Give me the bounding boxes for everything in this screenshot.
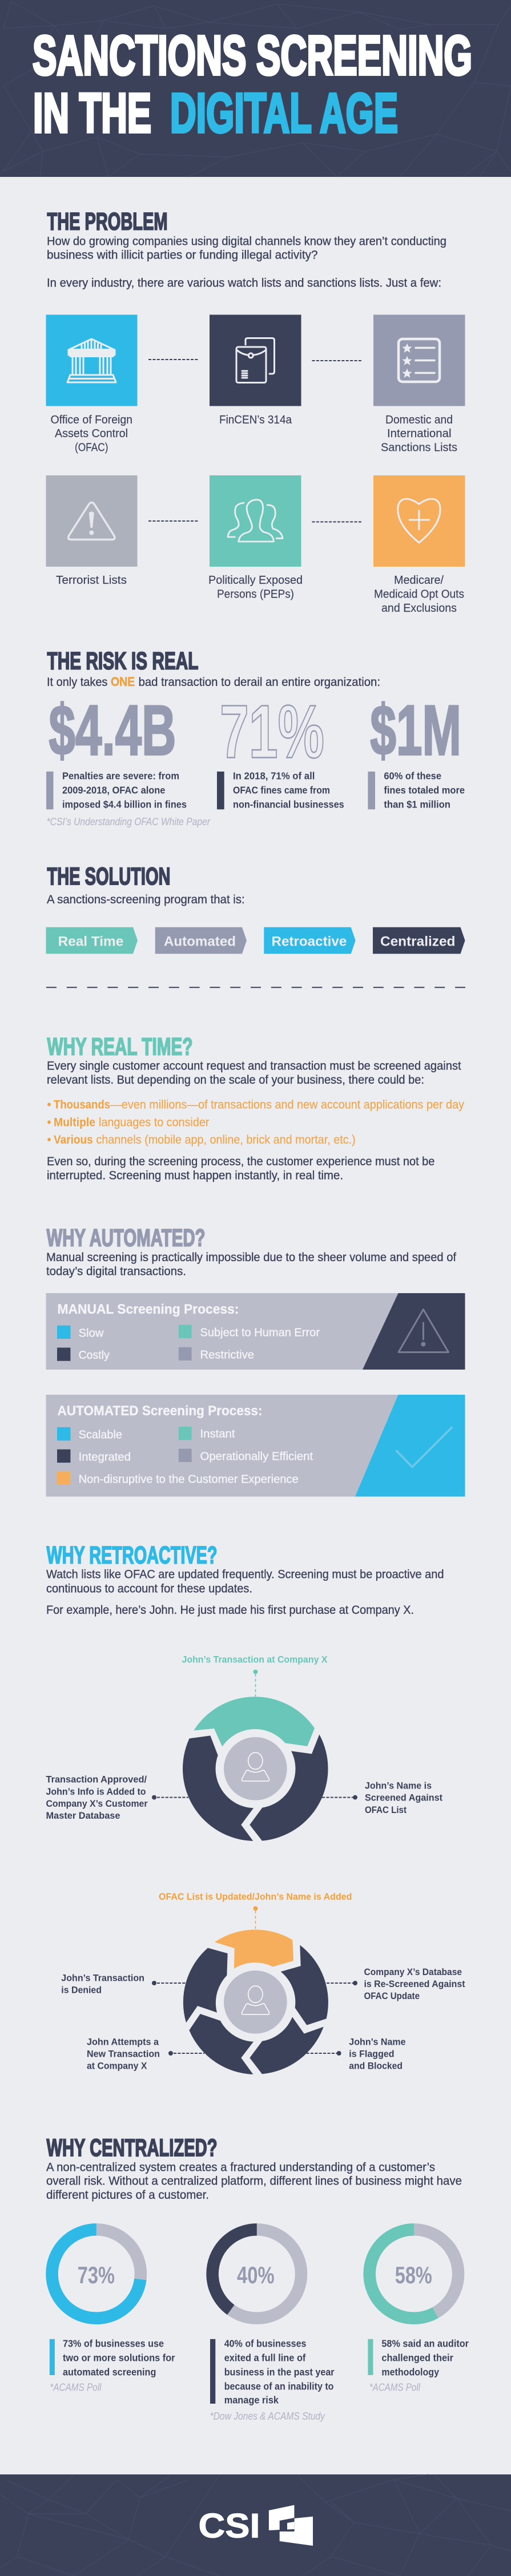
- bullet list: Multiple: [54, 1116, 95, 1129]
- icon: envelopes: [236, 338, 274, 382]
- label: Politically Exposed: [208, 574, 303, 587]
- icon: government building: [67, 339, 116, 382]
- intro text: Every single customer account request and transaction must be screened against: [47, 1059, 461, 1072]
- cycle chart: [183, 1929, 328, 2074]
- intro text: How do growing companies using digital channels know they aren’t conducting: [47, 235, 446, 248]
- panel: manual process: Subject to Human Error: [200, 1326, 320, 1339]
- subheading: bad transaction to derail an entire organization:: [139, 676, 380, 689]
- donut: 58%: [369, 2230, 458, 2318]
- intro text: different pictures of a customer.: [46, 2189, 209, 2202]
- label: [50, 414, 132, 454]
- panel: manual process: MANUAL Screening Process:: [57, 1302, 239, 1317]
- panel: manual process: Costly: [79, 1349, 110, 1362]
- intro text: today’s digital transactions.: [46, 1265, 186, 1278]
- fact: 73%: 73% of businesses use: [63, 2337, 164, 2349]
- connector: upper right: [327, 1981, 357, 1985]
- fact: 73%: *ACAMS Poll: [50, 2382, 102, 2393]
- section: why automated: [46, 1225, 465, 1496]
- logo: CSI: [199, 2506, 260, 2545]
- label: [381, 414, 457, 454]
- diagram: first cycle: [46, 1655, 442, 1841]
- closing text: interrupted. Screening must happen instantly, in real time.: [47, 1169, 343, 1182]
- bullet list: channels (mobile app, online, brick and mortar, etc.): [96, 1133, 356, 1146]
- heading: why automated: WHY AUTOMATED?: [47, 1225, 206, 1252]
- bullet list: Various: [54, 1133, 93, 1146]
- panel: manual process: [46, 1293, 465, 1370]
- connector dashes: [148, 360, 363, 522]
- panel: automated process: Operationally Efficient: [200, 1450, 313, 1463]
- connector: upper left: [152, 1981, 186, 1985]
- fact: 40%: because of an inability to: [224, 2380, 333, 2392]
- fact: 58%: challenged their: [381, 2352, 453, 2364]
- stat: $1M: $1M: [370, 692, 461, 770]
- icon: person: [242, 1753, 269, 1781]
- label: [208, 574, 303, 600]
- tile: PEPs: [208, 475, 303, 600]
- fact: 40%: exited a full line of: [224, 2352, 306, 2364]
- icon: star list: [399, 339, 440, 382]
- cycle label left: Company X’s Customer: [46, 1799, 148, 1809]
- stat: $1M: [368, 692, 465, 810]
- closing text: [47, 1155, 434, 1182]
- stat: $1M: 60% of these: [384, 770, 441, 782]
- title: IN THE: [33, 82, 151, 144]
- arrow: centralized: [373, 927, 465, 954]
- stat: $4.4B: 2009-2018, OFAC alone: [62, 785, 166, 796]
- label: FinCEN’s 314a: [219, 414, 292, 426]
- connector: top: [254, 1670, 258, 1697]
- heading: risk: THE RISK IS REAL: [47, 647, 199, 675]
- label: new transaction: at Company X: [87, 2061, 147, 2072]
- section: why centralized: [46, 2134, 469, 2422]
- fact: 40%: business in the past year: [224, 2366, 335, 2377]
- arrow: real time: Real Time: [58, 934, 123, 950]
- label: International: [387, 427, 451, 440]
- label: flagged: [349, 2037, 406, 2072]
- stat: $4.4B: [46, 692, 187, 810]
- section: the solution: [46, 863, 465, 954]
- fact: 58%: 58% said an auditor: [381, 2337, 469, 2349]
- section: why retroactive: [46, 1542, 465, 2074]
- label: Office of Foreign: [50, 414, 132, 426]
- stat: $4.4B: $4.4B: [49, 692, 176, 770]
- arrow: real time: [46, 927, 138, 954]
- donut: 73%: 73%: [78, 2262, 115, 2288]
- cycle label left: John’s Info is Added to: [46, 1787, 146, 1797]
- intro text: [47, 235, 446, 290]
- connector: lower right: [306, 2051, 341, 2056]
- fact: 73%: [50, 2337, 175, 2393]
- subheading: It only takes: [47, 676, 107, 689]
- panel: automated process: Integrated: [79, 1451, 131, 1464]
- tile: FinCEN: [210, 315, 301, 426]
- fact: 40%: *Dow Jones & ACAMS Study: [210, 2411, 325, 2422]
- cycle label right: OFAC List: [365, 1805, 407, 1815]
- tile: terrorist lists: [46, 475, 137, 587]
- label: flagged: is Flagged: [349, 2049, 395, 2060]
- heading: the problem: THE PROBLEM: [47, 208, 168, 235]
- icon: heart shield: [398, 499, 440, 543]
- label: denied: [61, 1973, 144, 1995]
- label: denied: is Denied: [61, 1985, 102, 1995]
- tile: Medicare: [373, 475, 465, 615]
- arrow: retroactive: [264, 927, 356, 954]
- label: re-screened: OFAC Update: [364, 1991, 420, 2001]
- bullet list: languages to consider: [99, 1116, 209, 1129]
- label: denied: John’s Transaction: [61, 1973, 144, 1983]
- footer banner: [0, 2474, 511, 2576]
- title: [33, 24, 472, 144]
- fact: 58%: methodology: [381, 2366, 439, 2377]
- header banner: [0, 0, 511, 177]
- label: new transaction: John Attempts a: [87, 2037, 159, 2048]
- cycle label left: Master Database: [46, 1811, 120, 1821]
- arrow: centralized: Centralized: [380, 934, 455, 950]
- label: Persons (PEPs): [217, 588, 294, 600]
- panel: automated process: AUTOMATED Screening Process:: [57, 1403, 263, 1419]
- cycle label top: OFAC List is Updated/John’s Name is Added: [159, 1892, 352, 1902]
- stat: 71%: OFAC fines came from: [233, 785, 330, 796]
- intro text: Manual screening is practically impossible due to the sheer volume and speed of: [46, 1251, 456, 1264]
- label: new transaction: New Transaction: [87, 2049, 160, 2060]
- heading: why centralized: WHY CENTRALIZED?: [47, 2134, 217, 2162]
- intro text: For example, here’s John. He just made his first purchase at Company X.: [46, 1604, 414, 1617]
- intro text: relevant lists. But depending on the scale of your business, there could be:: [47, 1073, 424, 1087]
- heading: why real time: WHY REAL TIME?: [47, 1033, 193, 1060]
- label: Terrorist Lists: [56, 574, 127, 587]
- panel: automated process: [46, 1395, 465, 1496]
- panel: manual process: Slow: [79, 1327, 104, 1340]
- title: DIGITAL AGE: [170, 82, 398, 144]
- fact: 73%: two or more solutions for: [63, 2352, 175, 2364]
- panel: manual process: Restrictive: [200, 1349, 254, 1362]
- cycle label right: Screened Against: [365, 1793, 442, 1803]
- panel: automated process: Scalable: [79, 1428, 122, 1441]
- connector: left: [152, 1795, 188, 1800]
- heading: solution: THE SOLUTION: [47, 863, 170, 890]
- donut: 40%: [212, 2230, 301, 2318]
- bullet list: —even millions—of transactions and new account applications per day: [110, 1099, 464, 1112]
- bullet list: Thousands: [54, 1099, 110, 1112]
- cycle label left: [46, 1775, 148, 1821]
- label: flagged: John’s Name: [349, 2037, 406, 2048]
- stat: 71%: 71%: [220, 689, 324, 774]
- fact: 58%: [368, 2337, 469, 2393]
- cycle label top: John’s Transaction at Company X: [182, 1655, 328, 1665]
- donut: 40%: 40%: [237, 2262, 275, 2288]
- connector: lower left: [168, 2051, 204, 2056]
- intro text: [46, 2161, 462, 2202]
- logo: [199, 2505, 313, 2546]
- label: new transaction: [87, 2037, 160, 2072]
- panel: automated process: Non-disruptive to the Customer Experience: [79, 1473, 299, 1485]
- section: why real time: [47, 1033, 464, 1182]
- stat: 71%: non-financial businesses: [233, 799, 344, 810]
- donut: 73%: [52, 2230, 140, 2318]
- bullet list: [47, 1099, 464, 1146]
- subheading: ONE: [111, 675, 135, 689]
- fact: 58%: *ACAMS Poll: [369, 2382, 421, 2393]
- fact: 73%: automated screening: [63, 2366, 156, 2377]
- intro text: In every industry, there are various watch lists and sanctions lists. Just a few:: [47, 276, 441, 290]
- bullet list: •: [47, 1133, 51, 1146]
- connector: top: [254, 1906, 258, 1929]
- intro text: [47, 1059, 461, 1087]
- arrow: retroactive: Retroactive: [272, 934, 347, 950]
- panel: automated process: Instant: [200, 1428, 235, 1440]
- icon: person: [242, 1986, 269, 2014]
- heading: why retroactive: WHY RETROACTIVE?: [47, 1542, 217, 1569]
- donut: 58%: 58%: [395, 2262, 432, 2288]
- cycle label right: [365, 1780, 442, 1815]
- fact: 40%: manage risk: [224, 2395, 279, 2406]
- section: the risk is real: [46, 647, 465, 827]
- diagram: second cycle: [61, 1892, 465, 2074]
- label: Domestic and: [385, 414, 453, 426]
- stat: $1M: fines totaled more: [384, 785, 465, 796]
- fact: 40%: 40% of businesses: [224, 2337, 307, 2349]
- intro text: [46, 1568, 444, 1617]
- arrow: automated: Automated: [164, 934, 236, 950]
- intro text: overall risk. Without a centralized platform, different lines of business might have: [46, 2175, 462, 2188]
- connector: right: [322, 1795, 357, 1800]
- label: Medicaid Opt Outs: [374, 588, 464, 600]
- subheading: [47, 675, 380, 689]
- cycle label left: Transaction Approved/: [46, 1775, 147, 1785]
- intro text: A non-centralized system creates a fractured understanding of a customer’s: [46, 2161, 435, 2174]
- label: Assets Control: [55, 427, 128, 440]
- intro text: [46, 1251, 456, 1278]
- subheading: A sanctions-screening program that is:: [47, 893, 245, 906]
- stat: $4.4B: Penalties are severe: from: [62, 770, 179, 782]
- stat: $4.4B: imposed $4.4 billion in fines: [62, 799, 187, 810]
- intro text: continuous to account for these updates.: [46, 1582, 252, 1595]
- label: Medicare/: [394, 574, 444, 587]
- tile: sanctions lists: [373, 315, 465, 454]
- cycle chart: [183, 1697, 328, 1841]
- section: the problem: [46, 208, 465, 615]
- source note: *CSI’s Understanding OFAC White Paper: [47, 816, 211, 827]
- stat: 71%: In 2018, 71% of all: [233, 770, 315, 782]
- closing text: Even so, during the screening process, the customer experience must not be: [47, 1155, 434, 1168]
- icon: group of people: [228, 500, 283, 542]
- bullet list: •: [47, 1099, 51, 1112]
- intro text: business with illicit parties or funding illegal activity?: [47, 249, 317, 261]
- label: re-screened: Company X’s Database: [364, 1967, 462, 1977]
- icon: warning triangle: [69, 502, 115, 540]
- stat: 71%: [217, 689, 344, 810]
- tile: OFAC: [46, 315, 137, 454]
- label: flagged: and Blocked: [349, 2061, 403, 2072]
- label: re-screened: is Re-Screened Against: [364, 1979, 465, 1989]
- icon: warning: [399, 1309, 449, 1352]
- label: Sanctions Lists: [381, 442, 457, 454]
- icon: check mark: [396, 1427, 452, 1467]
- label: (OFAC): [75, 442, 108, 454]
- intro text: Watch lists like OFAC are updated frequently. Screening must be proactive and: [46, 1568, 444, 1581]
- label: and Exclusions: [381, 602, 457, 615]
- bullet list: •: [47, 1116, 51, 1129]
- arrow: automated: [155, 927, 247, 954]
- cycle label right: John’s Name is: [365, 1780, 432, 1791]
- label: re-screened: [364, 1967, 465, 2001]
- fact: 40%: [210, 2337, 335, 2422]
- label: [374, 574, 464, 615]
- stat: $1M: than $1 million: [384, 799, 450, 810]
